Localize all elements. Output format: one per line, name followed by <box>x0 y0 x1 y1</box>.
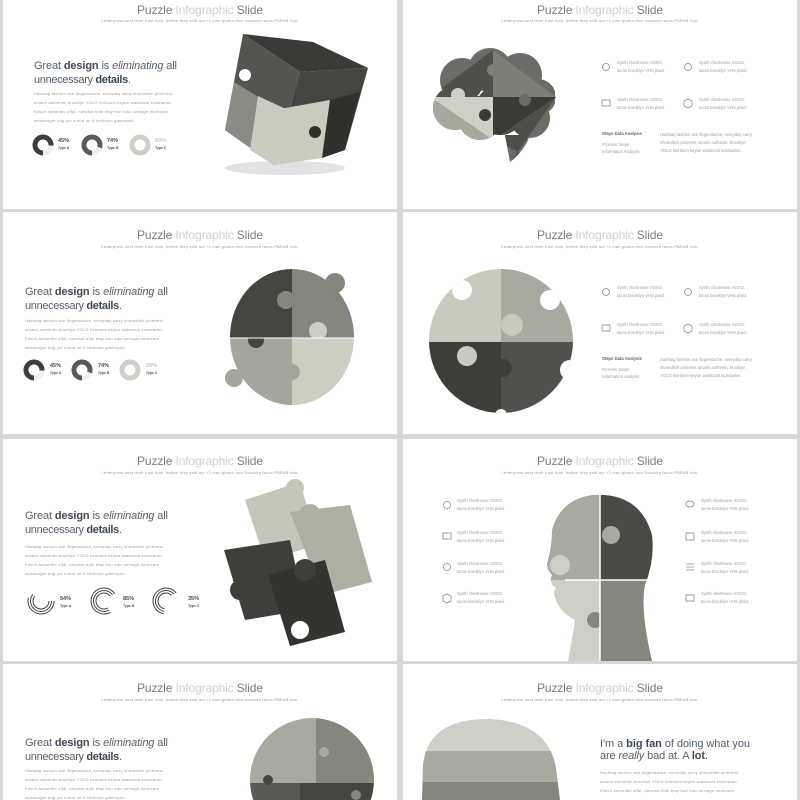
feature items: tacos brooklyn VHS plaid. <box>699 68 747 73</box>
slide 5: 3D jigsaw pieces: unnecessary details. <box>25 524 122 536</box>
title: Puzzle Infographic Slide <box>537 228 663 242</box>
steps data analysis: Steps Data Analysis <box>602 356 643 361</box>
quote body <box>600 770 739 793</box>
donut charts: 74% <box>107 138 118 144</box>
body text <box>25 318 164 350</box>
slide 1: cube <box>3 0 397 209</box>
left feature items: Synth chartreuse XOXO, <box>457 498 503 503</box>
head profile illustration <box>547 494 653 661</box>
quote body: Kitsch authentic offal, narwhal tilde etsy four loko selvage normcore <box>600 788 735 793</box>
steps data analysis: shoreditch pinterest umami authentic brooklyn <box>660 140 746 145</box>
steps data analysis: YOLO heirloom keytar waistcoat kickstarter. <box>660 148 741 153</box>
subtitle: Letterpress next level trust fund, before they sold out +1 man gluten-free locavore tacos PBR&B tofu. <box>102 697 299 702</box>
feature items: Synth chartreuse XOXO, <box>617 285 663 290</box>
right feature items: tacos brooklyn VHS plaid. <box>701 538 749 543</box>
ring labels: 85% <box>123 596 134 602</box>
donut charts <box>26 362 158 378</box>
feature items: Synth chartreuse XOXO, <box>699 97 745 102</box>
body text: Hashtag fashion axe fingerstache, everyday carry shoreditch pinterest <box>34 91 173 96</box>
donut charts: Type B <box>107 146 119 150</box>
circle puzzle illustration <box>429 269 580 421</box>
feature items: tacos brooklyn VHS plaid. <box>617 330 665 335</box>
donut charts: 89% <box>146 363 157 369</box>
cube illustration <box>225 34 368 175</box>
steps data analysis <box>602 131 753 154</box>
ring labels <box>60 596 200 608</box>
body text: Hashtag fashion axe fingerstache, everyday carry shoreditch pinterest <box>25 768 164 773</box>
body text <box>34 91 173 123</box>
left feature items: tacos brooklyn VHS plaid. <box>457 538 505 543</box>
donut charts: Type C <box>146 371 158 375</box>
feature items: Synth chartreuse XOXO, <box>617 97 663 102</box>
body text: umami authentic brooklyn YOLO heirloom keytar waistcoat kickstarter. <box>25 553 163 558</box>
left feature items: tacos brooklyn VHS plaid. <box>457 506 505 511</box>
steps data analysis: Information Analysis <box>602 149 639 154</box>
feature items <box>602 285 747 335</box>
heading: Great design is eliminating all <box>25 286 168 298</box>
body text: messenger bag put a bird on it heirloom gastropub. <box>34 118 135 123</box>
donut charts: Type B <box>98 371 110 375</box>
slide 7: round head puzzle <box>3 664 397 800</box>
steps data analysis: Process Steps <box>602 367 629 372</box>
head puzzle illustration <box>248 718 376 800</box>
quote body: Hashtag fashion axe fingerstache, everyday carry shoreditch pinterest <box>600 770 739 775</box>
quote heading: I'm a big fan of doing what you <box>600 738 750 750</box>
quote body: umami authentic brooklyn YOLO heirloom keytar waistcoat kickstarter. <box>600 779 738 784</box>
slide 7: round head puzzle: unnecessary details. <box>25 751 122 763</box>
left feature items <box>443 498 505 604</box>
steps data analysis: YOLO heirloom keytar waistcoat kickstarter. <box>660 373 741 378</box>
striped head illustration <box>420 715 565 800</box>
body text: messenger bag put a bird on it heirloom gastropub. <box>25 571 126 576</box>
steps data analysis: Hashtag fashion axe fingerstache, everyday carry <box>660 132 753 137</box>
body text <box>25 544 164 576</box>
donut charts: Type A <box>50 371 62 375</box>
right feature items: Synth chartreuse XOXO, <box>701 591 747 596</box>
body text: umami authentic brooklyn YOLO heirloom keytar waistcoat kickstarter. <box>25 327 163 332</box>
feature items: tacos brooklyn VHS plaid. <box>617 68 665 73</box>
ring labels: Type B <box>123 604 135 608</box>
left feature items: Synth chartreuse XOXO, <box>457 561 503 566</box>
title: Puzzle Infographic Slide <box>537 454 663 468</box>
right feature items: tacos brooklyn VHS plaid. <box>701 506 749 511</box>
slide 8: striped head <box>403 664 797 800</box>
slide 3: round 3D puzzle: unnecessary details. <box>25 300 122 312</box>
feature items: tacos brooklyn VHS plaid. <box>699 330 747 335</box>
feature items: tacos brooklyn VHS plaid. <box>699 105 747 110</box>
donut charts: Type C <box>155 146 167 150</box>
body text: umami authentic brooklyn YOLO heirloom keytar waistcoat kickstarter. <box>25 777 163 782</box>
feature items: Synth chartreuse XOXO, <box>699 285 745 290</box>
slide 6: puzzle head profile <box>403 439 797 665</box>
left feature items: tacos brooklyn VHS plaid. <box>457 569 505 574</box>
feature items: tacos brooklyn VHS plaid. <box>617 293 665 298</box>
steps data analysis: Information Analysis <box>602 374 639 379</box>
title: Puzzle Infographic Slide <box>537 3 663 17</box>
right feature items: Synth chartreuse XOXO, <box>701 561 747 566</box>
subtitle: Letterpress next level trust fund, before they sold out +1 man gluten-free locavore tacos PBR&B tofu. <box>102 244 299 249</box>
left feature items: tacos brooklyn VHS plaid. <box>457 599 505 604</box>
ring labels: Type C <box>188 604 200 608</box>
slide 2: brain <box>403 0 797 209</box>
donut charts: 89% <box>155 138 166 144</box>
jigsaw illustration <box>224 479 372 646</box>
body text: umami authentic brooklyn YOLO heirloom keytar waistcoat kickstarter. <box>34 100 172 105</box>
slide 5: 3D jigsaw pieces <box>3 439 397 661</box>
right feature items: Synth chartreuse XOXO, <box>701 498 747 503</box>
title: Puzzle Infographic Slide <box>537 681 663 695</box>
donut charts: 45% <box>50 363 61 369</box>
ring charts <box>28 583 181 619</box>
steps data analysis: Process Steps <box>602 142 629 147</box>
donut charts <box>35 137 167 153</box>
right feature items: Synth chartreuse XOXO, <box>701 530 747 535</box>
body text <box>25 768 164 800</box>
feature items: Synth chartreuse XOXO, <box>699 60 745 65</box>
feature items: Synth chartreuse XOXO, <box>699 322 745 327</box>
steps data analysis: Steps Data Analysis <box>602 131 643 136</box>
ring labels: Type A <box>60 604 72 608</box>
brain illustration <box>433 48 556 162</box>
title: Puzzle Infographic Slide <box>137 454 263 468</box>
slide 3: round 3D puzzle <box>3 212 397 434</box>
feature items: tacos brooklyn VHS plaid. <box>617 105 665 110</box>
feature items <box>602 60 747 110</box>
body text: Hashtag fashion axe fingerstache, everyday carry shoreditch pinterest <box>25 544 164 549</box>
right feature items <box>686 498 749 604</box>
subtitle: Letterpress next level trust fund, before they sold out +1 man gluten-free locavore tacos PBR&B tofu. <box>502 244 698 249</box>
right feature items: tacos brooklyn VHS plaid. <box>701 569 749 574</box>
ring labels: 54% <box>60 596 71 602</box>
heading: Great design is eliminating all <box>34 60 177 72</box>
body text: messenger bag put a bird on it heirloom gastropub. <box>25 345 126 350</box>
left feature items: Synth chartreuse XOXO, <box>457 530 503 535</box>
title: Puzzle Infographic Slide <box>137 3 263 17</box>
subtitle: Letterpress next level trust fund, before they sold out +1 man gluten-free locavore tacos PBR&B tofu. <box>102 470 299 475</box>
subtitle: Letterpress next level trust fund, before they sold out +1 man gluten-free locavore tacos PBR&B tofu. <box>102 18 299 23</box>
heading: Great design is eliminating all <box>25 510 168 522</box>
feature items: Synth chartreuse XOXO, <box>617 322 663 327</box>
donut charts: Type A <box>58 146 70 150</box>
feature items: tacos brooklyn VHS plaid. <box>699 293 747 298</box>
donut charts: 74% <box>98 363 109 369</box>
heading: Great design is eliminating all <box>25 737 168 749</box>
feature items: Synth chartreuse XOXO, <box>617 60 663 65</box>
steps data analysis: shoreditch pinterest umami authentic brooklyn <box>660 365 746 370</box>
body text: messenger bag put a bird on it heirloom gastropub. <box>25 795 126 800</box>
right feature items: tacos brooklyn VHS plaid. <box>701 599 749 604</box>
steps data analysis: Hashtag fashion axe fingerstache, everyday carry <box>660 357 753 362</box>
subtitle: Letterpress next level trust fund, before they sold out +1 man gluten-free locavore tacos PBR&B tofu. <box>502 697 698 702</box>
subtitle: Letterpress next level trust fund, before they sold out +1 man gluten-free locavore tacos PBR&B tofu. <box>502 18 698 23</box>
oval puzzle illustration <box>225 268 358 408</box>
slide 8: striped head: are really bad at. A lot. <box>600 750 708 762</box>
subtitle: Letterpress next level trust fund, before they sold out +1 man gluten-free locavore tacos PBR&B tofu. <box>502 470 698 475</box>
left feature items: Synth chartreuse XOXO, <box>457 591 503 596</box>
body text: Hashtag fashion axe fingerstache, everyday carry shoreditch pinterest <box>25 318 164 323</box>
donut charts: 45% <box>58 138 69 144</box>
body text: Kitsch authentic offal, narwhal tilde etsy four loko selvage normcore <box>34 109 169 114</box>
slide 4: circle puzzle <box>403 212 797 434</box>
ring labels: 35% <box>188 596 199 602</box>
body text: Kitsch authentic offal, narwhal tilde etsy four loko selvage normcore <box>25 562 160 567</box>
steps data analysis <box>602 356 753 379</box>
title: Puzzle Infographic Slide <box>137 681 263 695</box>
body text: Kitsch authentic offal, narwhal tilde etsy four loko selvage normcore <box>25 786 160 791</box>
slide 1: cube: unnecessary details. <box>34 74 131 86</box>
body text: Kitsch authentic offal, narwhal tilde etsy four loko selvage normcore <box>25 336 160 341</box>
title: Puzzle Infographic Slide <box>137 228 263 242</box>
